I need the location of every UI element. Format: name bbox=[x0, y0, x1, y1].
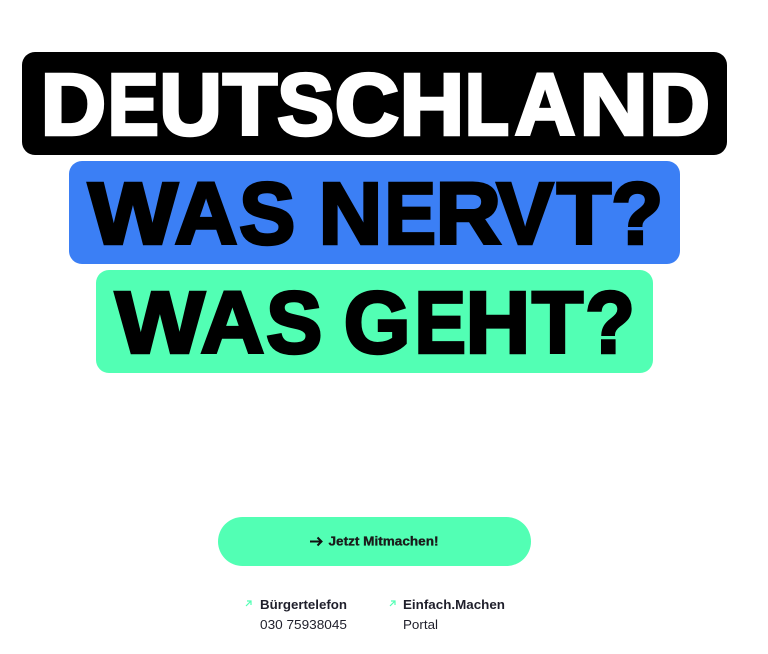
heading: Was nervt?: W bbox=[88, 165, 179, 262]
heading: Deutschland: H bbox=[400, 56, 464, 153]
heading: Deutschland: A bbox=[515, 56, 575, 153]
heading: Deutschland: D bbox=[41, 56, 106, 153]
heading: Deutschland: S bbox=[277, 56, 334, 153]
link: Einfach.Machen: Einfach.Machen bbox=[403, 598, 505, 612]
heading: Was geht?: A bbox=[201, 274, 264, 371]
icon: small arrow bbox=[246, 601, 251, 606]
heading: Was nervt?: R bbox=[436, 165, 501, 262]
heading: Was geht?: ? bbox=[585, 274, 635, 371]
heading: Was nervt?: T bbox=[557, 165, 611, 262]
heading: Was geht?: S bbox=[266, 274, 322, 371]
heading: Was geht?: E bbox=[415, 274, 466, 371]
link: Bürgertelefon: Bürgertelefon bbox=[260, 598, 347, 612]
link: Einfach.Machen: Portal bbox=[403, 617, 438, 632]
heading: Was nervt?: ? bbox=[611, 165, 663, 262]
link: Einfach.Machen bbox=[390, 598, 505, 632]
heading: Was geht?: G bbox=[344, 274, 410, 371]
heading: Was geht?: W bbox=[115, 274, 206, 371]
heading: Deutschland: D bbox=[649, 56, 710, 153]
icon: small arrow bbox=[390, 601, 395, 606]
heading: Was nervt?: N bbox=[319, 165, 382, 262]
heading: Was nervt?: S bbox=[239, 165, 295, 262]
heading: Deutschland: T bbox=[223, 56, 277, 153]
button: Jetzt Mitmachen bbox=[218, 517, 531, 566]
link: Bürgertelefon: 030 75938045 bbox=[260, 617, 347, 632]
heading: Deutschland: N bbox=[579, 56, 648, 153]
heading: Was geht?: T bbox=[532, 274, 583, 371]
heading: Was geht? bbox=[96, 270, 653, 373]
button: Jetzt Mitmachen: Jetzt Mitmachen! bbox=[328, 534, 438, 548]
heading: Was nervt?: E bbox=[385, 165, 436, 262]
heading: Deutschland: U bbox=[159, 56, 222, 153]
heading: Deutschland: C bbox=[335, 56, 399, 153]
heading: Deutschland: E bbox=[108, 56, 159, 153]
heading: Was geht?: H bbox=[466, 274, 530, 371]
heading: Deutschland: L bbox=[465, 56, 509, 153]
heading: Was nervt?: A bbox=[175, 165, 237, 262]
link: Bürgertelefon bbox=[246, 598, 347, 632]
heading: Deutschland bbox=[22, 52, 727, 155]
heading: Was nervt? bbox=[69, 161, 680, 264]
icon: arrow right bbox=[310, 538, 322, 546]
heading: Was nervt?: V bbox=[497, 165, 553, 262]
